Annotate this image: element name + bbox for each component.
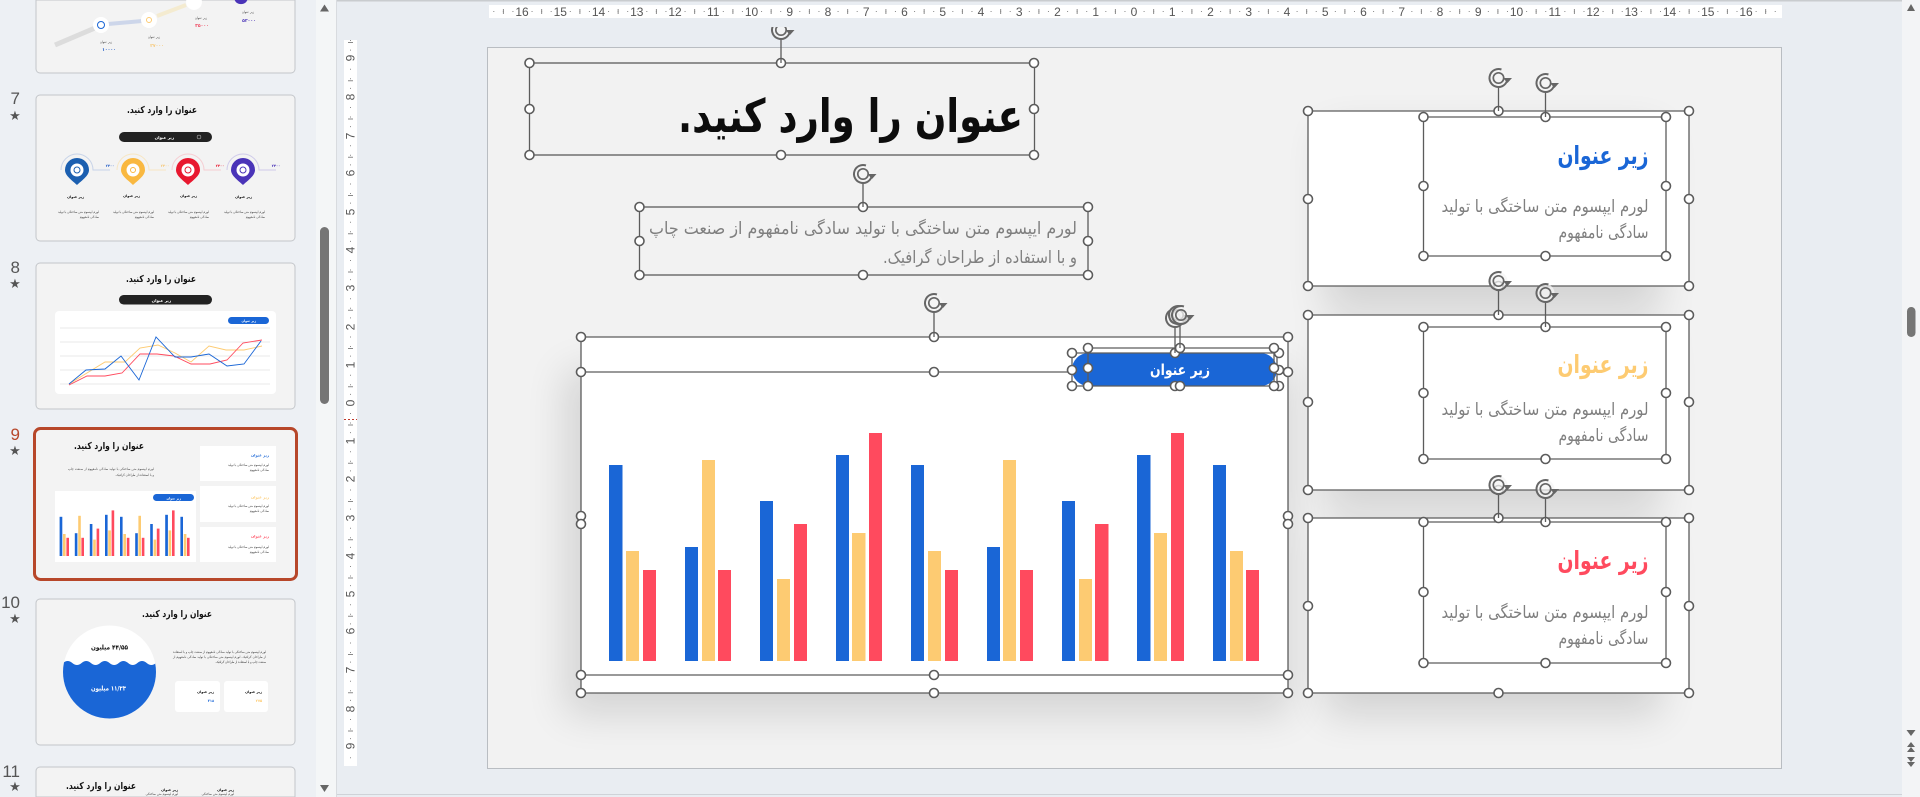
chart selection frames [581, 337, 1288, 693]
card 2 selection frames [1308, 315, 1689, 490]
thumbnail 10 number [2, 596, 20, 623]
thumbnail 7 number [10, 92, 20, 120]
thumbnail 7: عنوان را وارد کنید. [127, 105, 197, 116]
horizontal ruler: 1 [1169, 5, 1176, 19]
vertical ruler: 2 [344, 323, 358, 330]
horizontal ruler: 9 [1475, 5, 1482, 19]
vertical ruler: 6 [344, 169, 358, 176]
thumbnail 8: زیر عنوان [152, 298, 172, 303]
thumbnail 10: لورم ایپسوم متن ساختگی با تولید سادگی نامفهوم از صنعت چاپ و با استفاده [173, 650, 266, 655]
main scrollbar [1902, 0, 1920, 797]
vertical ruler: 9 [344, 54, 358, 61]
thumbnail 9 selected: زیر عنوان [251, 534, 269, 538]
thumbnail 11 partial: عنوان را وارد کنید. [66, 781, 136, 792]
vertical ruler: 4 [344, 552, 358, 559]
vertical ruler [344, 40, 358, 766]
thumbnail 9 selected: لورم ایپسوم متن ساختگی با تولید [228, 463, 269, 468]
bottom window edge [337, 794, 1902, 795]
card 1 [1308, 111, 1689, 286]
thumbnail 6 partial: زیر عنوان [100, 40, 113, 44]
slide canvas [488, 48, 1782, 768]
thumbnail 11 number: 11 [2, 762, 20, 781]
thumbnail 9 selected: سادگی نامفهوم [250, 509, 269, 514]
horizontal ruler: 14 [1663, 5, 1676, 19]
horizontal ruler: 9 [786, 5, 793, 19]
subtitle pill [1072, 348, 1277, 386]
thumbnail 10: زیر عنوان [197, 690, 214, 694]
thumbnail 10: ۲۷۵ [256, 699, 263, 703]
thumbnail 8: عنوان را وارد کنید. [126, 274, 196, 285]
thumbnail 10: عنوان را وارد کنید. [142, 609, 212, 620]
thumbnail 11 number [4, 766, 20, 791]
thumbnail 7: ۲۴۰۰ [216, 164, 224, 168]
thumbnail 7: ۲۴۰۰ [272, 164, 280, 168]
thumbnail 9 selected: زیر عنوان [251, 454, 269, 458]
thumbnail 7: سادگی نامفهوم [80, 215, 99, 220]
vertical ruler: 3 [344, 514, 358, 521]
top window edge [12, 0, 1902, 2]
vertical ruler: 1 [344, 361, 358, 368]
horizontal ruler: 15 [1701, 5, 1715, 19]
horizontal ruler: 0 [1131, 5, 1138, 19]
intro paragraph [640, 207, 1088, 275]
vertical ruler: 1 [344, 437, 358, 444]
horizontal ruler: 12 [668, 5, 682, 19]
card 3: زیر عنوان [1558, 546, 1648, 576]
thumbnail 9 selected: لورم ایپسوم متن ساختگی با تولید سادگی نامفهوم از صنعت چاپ [68, 467, 154, 472]
horizontal ruler: 13 [630, 5, 644, 19]
horizontal ruler: 5 [1322, 5, 1329, 19]
thumbnail 9 selected: لورم ایپسوم متن ساختگی با تولید [228, 545, 269, 550]
thumbnail 7 number: 7 [11, 89, 20, 108]
vertical ruler: 7 [344, 132, 358, 139]
card 2: زیر عنوان [1558, 350, 1648, 380]
card 3: لورم ایپسوم متن ساختگی با تولید [1442, 602, 1648, 623]
title selection frame [530, 63, 1034, 155]
thumbnail 10: زیر عنوان [245, 690, 262, 694]
paragraph selection frame [640, 207, 1088, 275]
horizontal ruler: 4 [1284, 5, 1291, 19]
card 1: سادگی نامفهوم [1558, 222, 1648, 243]
thumbnail 9 number: ★ [9, 444, 21, 459]
horizontal ruler: 14 [592, 5, 605, 19]
thumbnail 9 selected: و با استفاده از طراحان گرافیک. [115, 473, 155, 477]
vertical ruler: 7 [344, 666, 358, 673]
thumbnail 6 partial: زیر عنوان [242, 10, 255, 14]
horizontal ruler: 6 [1360, 5, 1367, 19]
thumbnail 7: لورم ایپسوم متن ساختگی با تولید [113, 210, 154, 215]
thumbnail 8 number [10, 262, 20, 288]
thumbnail 9 selected: زیر عنوان [166, 496, 181, 500]
thumbnail 10: صنعت چاپ و با استفاده از طراحان گرافیک. [215, 660, 266, 664]
card 2: لورم ایپسوم متن ساختگی با تولید [1442, 399, 1648, 420]
thumbnail 11 partial: لورم ایپسوم متن ساختگی [146, 792, 178, 797]
card 1 selection frames [1308, 111, 1689, 286]
thumbnail 10 number: ★ [9, 612, 21, 627]
thumbnail 11 partial: زیر عنوان [161, 788, 178, 792]
thumbnail 6 partial [36, 0, 295, 73]
thumbnail 9 selected: زیر عنوان [251, 496, 269, 500]
card shadows [1325, 130, 1660, 715]
vertical ruler: 0 [344, 399, 358, 406]
thumbnail 6 partial: زیر عنوان [195, 16, 208, 20]
horizontal ruler: 3 [1016, 5, 1023, 19]
thumbnail pane scrollbar [316, 0, 337, 797]
vertical ruler: 5 [344, 208, 358, 215]
card 1: لورم ایپسوم متن ساختگی با تولید [1442, 196, 1648, 217]
thumbnail 9 selected: سادگی نامفهوم [250, 468, 269, 473]
horizontal ruler: 2 [1207, 5, 1214, 19]
thumbnail 6 partial: زیر عنوان [148, 35, 161, 39]
thumbnail 9 number: 9 [11, 425, 20, 444]
horizontal ruler: 8 [825, 5, 832, 19]
thumbnail 6 partial: ۵۲۰۰۰ [242, 18, 256, 24]
thumbnail 6 partial: ۳۵۰۰۰ [195, 23, 209, 29]
vertical ruler: 6 [344, 627, 358, 634]
horizontal ruler: 16 [1739, 5, 1753, 19]
thumbnail 9 selected: عنوان را وارد کنید. [74, 441, 144, 452]
thumbnail 7 [36, 95, 295, 241]
selection handles [525, 58, 1694, 698]
horizontal ruler: 11 [707, 5, 720, 19]
thumbnail 7: زیر عنوان [155, 135, 175, 140]
horizontal ruler: 10 [1510, 5, 1523, 19]
horizontal ruler: 2 [1054, 5, 1061, 19]
thumbnail 11 number: ★ [9, 780, 21, 795]
horizontal ruler: 3 [1245, 5, 1252, 19]
thumbnail 7: زیر عنوان [180, 194, 197, 198]
horizontal ruler: 15 [554, 5, 567, 19]
thumbnail 6 partial: ۲۷۰۰۰ [150, 43, 164, 49]
panel: bar chart [581, 337, 1288, 693]
thumbnail 7: ۲۴۰۰ [161, 164, 169, 168]
main title [530, 63, 1034, 155]
horizontal ruler: 13 [1625, 5, 1638, 19]
thumbnail 10: ۱۱/۳۳ میلیون [91, 684, 126, 692]
card 3 [1308, 518, 1689, 693]
subtitle pill: زیر عنوان [1150, 361, 1210, 379]
vertical ruler: 9 [344, 742, 358, 749]
intro paragraph: لورم ایپسوم متن ساختگی با تولید سادگی نامفهوم از صنعت چاپ [649, 218, 1077, 239]
thumbnail 7: زیر عنوان [67, 195, 84, 199]
thumbnail 8 number: 8 [11, 258, 20, 277]
thumbnail 7 number: ★ [9, 109, 21, 124]
thumbnail 7: زیر عنوان [123, 194, 140, 198]
rotation stems and icons [769, 18, 1559, 522]
horizontal ruler: 7 [1398, 5, 1405, 19]
card 3 selection frames [1308, 518, 1689, 693]
intro paragraph: و با استفاده از طراحان گرافیک. [883, 247, 1077, 268]
vertical ruler: 2 [344, 475, 358, 482]
thumbnail 11 partial: زیر عنوان [217, 788, 234, 792]
chart panel shadow [565, 370, 1290, 715]
thumbnail 10: ۴۴/۵۵ میلیون [91, 644, 128, 652]
card 1: زیر عنوان [1558, 141, 1648, 171]
card 3: سادگی نامفهوم [1558, 628, 1648, 649]
thumbnail 7: سادگی نامفهوم [135, 215, 154, 220]
thumbnail 9 selected: لورم ایپسوم متن ساختگی با تولید [228, 504, 269, 509]
vertical ruler: 5 [344, 590, 358, 597]
thumbnail 11 partial: لورم ایپسوم متن ساختگی [202, 792, 234, 797]
horizontal ruler: 1 [1092, 5, 1099, 19]
thumbnail 7: سادگی نامفهوم [190, 215, 209, 220]
horizontal ruler: 5 [939, 5, 946, 19]
thumbnail 7: لورم ایپسوم متن ساختگی با تولید [224, 210, 265, 215]
bars [609, 433, 1259, 661]
thumbnail 7: لورم ایپسوم متن ساختگی با تولید [168, 210, 209, 215]
thumbnail 9 selected: سادگی نامفهوم [250, 550, 269, 555]
main title: عنوان را وارد کنید. [678, 89, 1023, 143]
vertical ruler: 8 [344, 93, 358, 100]
panel: slide thumbnails [0, 0, 316, 797]
thumbnail 10: ۳۱۸ [208, 699, 215, 703]
thumbnail 9 number [10, 428, 20, 455]
thumbnail 11 partial [36, 767, 295, 797]
pill selection frames [1072, 348, 1277, 386]
horizontal ruler: 11 [1549, 5, 1561, 19]
thumbnail 8 number: ★ [9, 277, 21, 292]
thumbnail 8: زیر عنوان [241, 319, 256, 323]
horizontal ruler: 12 [1586, 5, 1600, 19]
vertical ruler: 3 [344, 284, 358, 291]
card 2: سادگی نامفهوم [1558, 425, 1648, 446]
horizontal ruler [489, 5, 1782, 19]
thumbnail 10 number: 10 [1, 593, 20, 612]
thumbnail 10: از طراحان گرافیک. لورم ایپسوم متن ساختگی با تولید سادگی نامفهوم از [172, 655, 266, 660]
horizontal ruler: 16 [515, 5, 529, 19]
thumbnail 10 [36, 599, 295, 745]
thumbnail 9 selected [34, 428, 296, 580]
vertical ruler: 8 [344, 705, 358, 712]
card 2 [1308, 315, 1689, 490]
horizontal ruler: 8 [1437, 5, 1444, 19]
thumbnail 7: لورم ایپسوم متن ساختگی با تولید [58, 210, 99, 215]
thumbnail 6 partial: ۱۰۰۰۰ [102, 48, 116, 53]
thumbnail 8 [36, 263, 295, 409]
thumbnail 7: زیر عنوان [235, 195, 252, 199]
thumbnail 7: ۲۴۰۰ [106, 164, 114, 168]
horizontal ruler: 4 [978, 5, 985, 19]
horizontal ruler: 6 [901, 5, 908, 19]
horizontal ruler: 10 [745, 5, 758, 19]
vertical ruler: 4 [344, 246, 358, 253]
horizontal ruler: 7 [863, 5, 870, 19]
thumbnail 7: سادگی نامفهوم [246, 215, 265, 220]
